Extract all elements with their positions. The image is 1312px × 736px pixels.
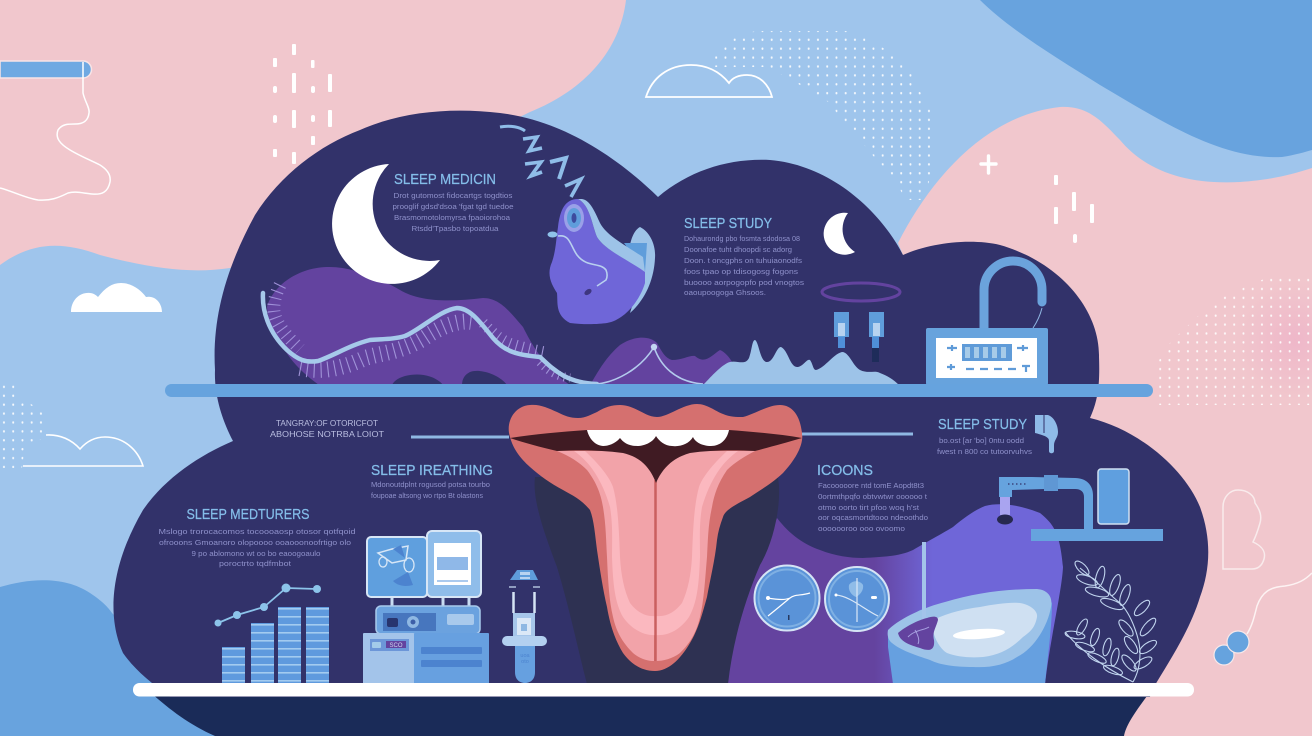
- icon: medical monitor workstation: SCO: [389, 643, 403, 649]
- icon: headband ring and two electrodes: [822, 283, 900, 362]
- text block: sleep breathing: [371, 463, 493, 500]
- heading: sleep study lower: SLEEP STUDY: [938, 417, 1027, 433]
- decoration: right dashes: [1054, 175, 1094, 243]
- lower white shelf: [133, 683, 1194, 696]
- connector line left of mouth: [411, 436, 509, 438]
- icon: medical monitor workstation: [363, 531, 489, 684]
- panel: upper left purple hill: [267, 267, 570, 385]
- heading: sleep medicin: SLEEP MEDICIN: [394, 172, 496, 188]
- text block: sleep medicine: Drot gutomost fidocartgs togdtios: [394, 191, 513, 200]
- icon: monitor device with arch: [926, 261, 1048, 385]
- text block: sleep medicine: [392, 172, 514, 233]
- icon: cloud outline top: [646, 65, 772, 97]
- heading: icoons: ICOONS: [817, 463, 873, 479]
- decoration: dot field right: [1158, 273, 1312, 405]
- background: mid blue blob top right: [980, 0, 1312, 157]
- text block: icons: [817, 463, 928, 533]
- text block: sleep study upper: oaoupoogoga Ghsoos.: [684, 288, 766, 297]
- text block: sleep measures: Mslogo trorocacomos tocoooaosp otosor qotfqoid: [158, 527, 356, 536]
- text block: sleep study upper: buoooo aorpogopfo pod vnogtos: [684, 278, 804, 287]
- text block: sleep measures: [158, 507, 356, 568]
- panel: dark cloud: [113, 111, 1208, 697]
- icon: bathtub with probe: [888, 542, 1052, 684]
- chart: sleep ribbon with tick marks: [263, 285, 703, 384]
- decoration: dot field left: [0, 380, 50, 468]
- tongue inner centre: [585, 451, 727, 616]
- text block: sleep study lower: bo.ost [ar 'bo] 0ntu oodd: [939, 436, 1024, 445]
- navy base under white shelf: [150, 692, 1150, 736]
- background: pink blob top left: [0, 0, 626, 270]
- background: mid blue blob bottom left: [0, 580, 230, 736]
- text block: sleep measures: ofrooons Gmoanoro olopoooo ooaooonoofrtigo olo: [159, 538, 351, 547]
- text block: icons: oor oqcasmortdtooo ndeoothdo: [818, 513, 928, 522]
- chart: light blue sleep wave: [703, 340, 899, 385]
- icon: balloons on line: [1214, 573, 1312, 665]
- chart: trend line with points: [214, 584, 321, 626]
- text block: sleep study upper: Doonafoe tuht dhoopdi sc adorg: [684, 245, 792, 254]
- text block: sleep measures: 9 po ablomono wt oo bo eaoogoaulo: [192, 549, 320, 558]
- icon: mouth and tongue: [509, 404, 802, 671]
- text block: icons: ooooooroo ooo ovoomo: [818, 524, 905, 533]
- tongue centre line: [654, 480, 657, 661]
- tongue light stripe: [574, 451, 738, 635]
- heading: sleep study: SLEEP STUDY: [684, 216, 772, 232]
- icon: mask small: [1035, 415, 1058, 453]
- text block: sleep breathing: foupoae altsong wo rtpo Bt olastons: [371, 491, 483, 500]
- background: pink glow: [1235, 280, 1312, 400]
- icon: sleeping head with CPAP tube: [548, 199, 655, 324]
- heading: sleep breathing: SLEEP IREATHING: [371, 463, 493, 479]
- text block: sleep study lower: [937, 417, 1032, 456]
- decoration: plus sign: [981, 156, 996, 173]
- text block: sleep medicine: prooglif gdsd'dsoa 'fgat tgd tuedoe: [392, 202, 514, 211]
- icon: sleeping z letters: [500, 126, 581, 197]
- text block: icons: 0ortmthpqfo obtvwtwr oooooo t: [818, 492, 928, 501]
- text block: sleep breathing: Mdonoutdplnt rogusod potsa tourbo: [371, 480, 490, 489]
- icon: test tube device: uoa: [520, 653, 531, 659]
- panel: second purple hill: [590, 338, 732, 385]
- text block: small caption left: ABOHOSE NOTRBA LOIOT: [270, 430, 384, 439]
- mouth interior: [510, 430, 802, 483]
- text block: sleep study upper: [684, 216, 804, 297]
- tongue base: [557, 450, 755, 661]
- icon: faucet on shelf with tablet: [997, 469, 1163, 541]
- text block: sleep study upper: Dohaurondg pbo fosmta sdodosa 08: [684, 234, 800, 243]
- connector line right of mouth: [802, 432, 913, 436]
- icon: bubble outline right: [1223, 490, 1265, 569]
- text block: small caption left: [270, 419, 384, 439]
- heading: sleep medturers: SLEEP MEDTURERS: [186, 507, 310, 523]
- upper blue shelf: [165, 384, 1153, 397]
- decoration: top left bar with line: [0, 61, 110, 200]
- background: pink blob right: [898, 107, 1312, 736]
- icon: cloud outline lower left: [23, 435, 143, 466]
- text block: icons: otmo oorto tirt pfoo woq h'st: [818, 503, 920, 512]
- icon: large crescent moon: [332, 164, 440, 284]
- text block: sleep measures: poroctrto tqdfmbot: [219, 559, 292, 568]
- chart: striped bars: [222, 607, 329, 684]
- text block: sleep medicine: Rtsdd'Tpasbo topoatdua: [412, 224, 499, 233]
- icon: two round gauges: [754, 566, 889, 631]
- text block: sleep study upper: foos tpao op tdisogosg fogons: [684, 267, 798, 276]
- text block: sleep medicine: Brasmomotolomyrsa fpaoiorohoa: [394, 213, 511, 222]
- teeth: [587, 430, 729, 446]
- icon: test tube device: oto: [521, 659, 529, 665]
- decoration: dot field top: [710, 31, 931, 200]
- text block: sleep study lower: fwest n 800 co tutoorvuhvs: [937, 447, 1032, 456]
- icon: small crescent moon: [824, 213, 855, 255]
- panel: dark throat behind tongue: [535, 477, 779, 684]
- text block: sleep study upper: Doon. t oncgphs on tuhuiaonodfs: [684, 256, 802, 265]
- icon: fern leaves outline: [1065, 559, 1158, 682]
- text block: icons: Facooooore ntd tomE Aopdt8t3: [818, 481, 924, 490]
- text block: small caption left: TANGRAY:OF OTORICFOT: [276, 419, 378, 428]
- decoration: top left dashes: [273, 44, 332, 164]
- panel: lower right purple and violet blob: [720, 504, 1063, 684]
- icon: test tube device: [502, 570, 547, 683]
- icon: white cloud: [71, 283, 162, 312]
